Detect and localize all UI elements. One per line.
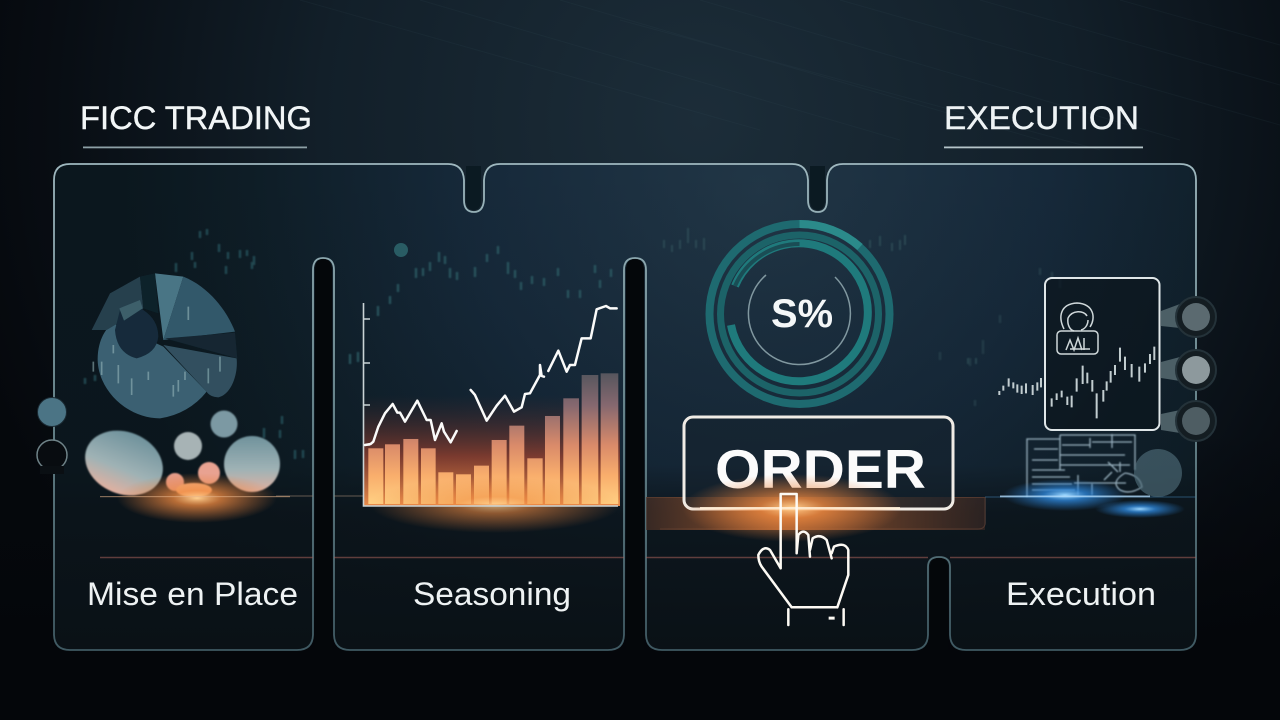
panel frame with notches and slots — [50, 160, 1200, 655]
gauge rings — [710, 224, 890, 404]
blue glows — [1000, 479, 1185, 518]
data bubbles — [75, 410, 280, 507]
panel: Execution — [940, 268, 1216, 612]
panel: Order — [646, 224, 985, 625]
faint background ticks — [85, 229, 303, 459]
divider lines across panels — [100, 496, 1196, 558]
label: Seasoning — [413, 576, 571, 612]
tablet candlestick chart — [999, 347, 1154, 418]
connector nodes on left edge — [37, 398, 67, 474]
title: Execution: EXECUTION — [944, 100, 1139, 136]
icon: trader with headset — [1057, 303, 1098, 354]
bar chart — [364, 373, 620, 533]
data table sketch — [1027, 434, 1142, 497]
order button: ORDER — [715, 438, 926, 500]
order button — [684, 417, 953, 509]
tablet — [999, 278, 1160, 430]
label: Execution — [1006, 576, 1156, 612]
side knobs — [1161, 297, 1216, 441]
disc — [1134, 449, 1182, 497]
icon: pointing hand — [758, 494, 848, 625]
orange press glow — [682, 474, 902, 542]
chart: pie — [92, 273, 237, 418]
label: Mise en Place — [87, 576, 298, 612]
faint ticks — [664, 228, 976, 364]
faint market ticks — [350, 243, 611, 364]
title: FICC Trading: FICC TRADING — [80, 100, 312, 136]
orange band behind button — [646, 497, 985, 530]
chart axes — [364, 303, 618, 506]
orange glow — [117, 473, 277, 523]
line chart — [365, 306, 617, 445]
panel: Mise en Place — [37, 229, 303, 612]
panel: Seasoning — [350, 243, 620, 612]
faint ticks — [940, 268, 1060, 406]
gauge value: S% — [771, 292, 833, 336]
